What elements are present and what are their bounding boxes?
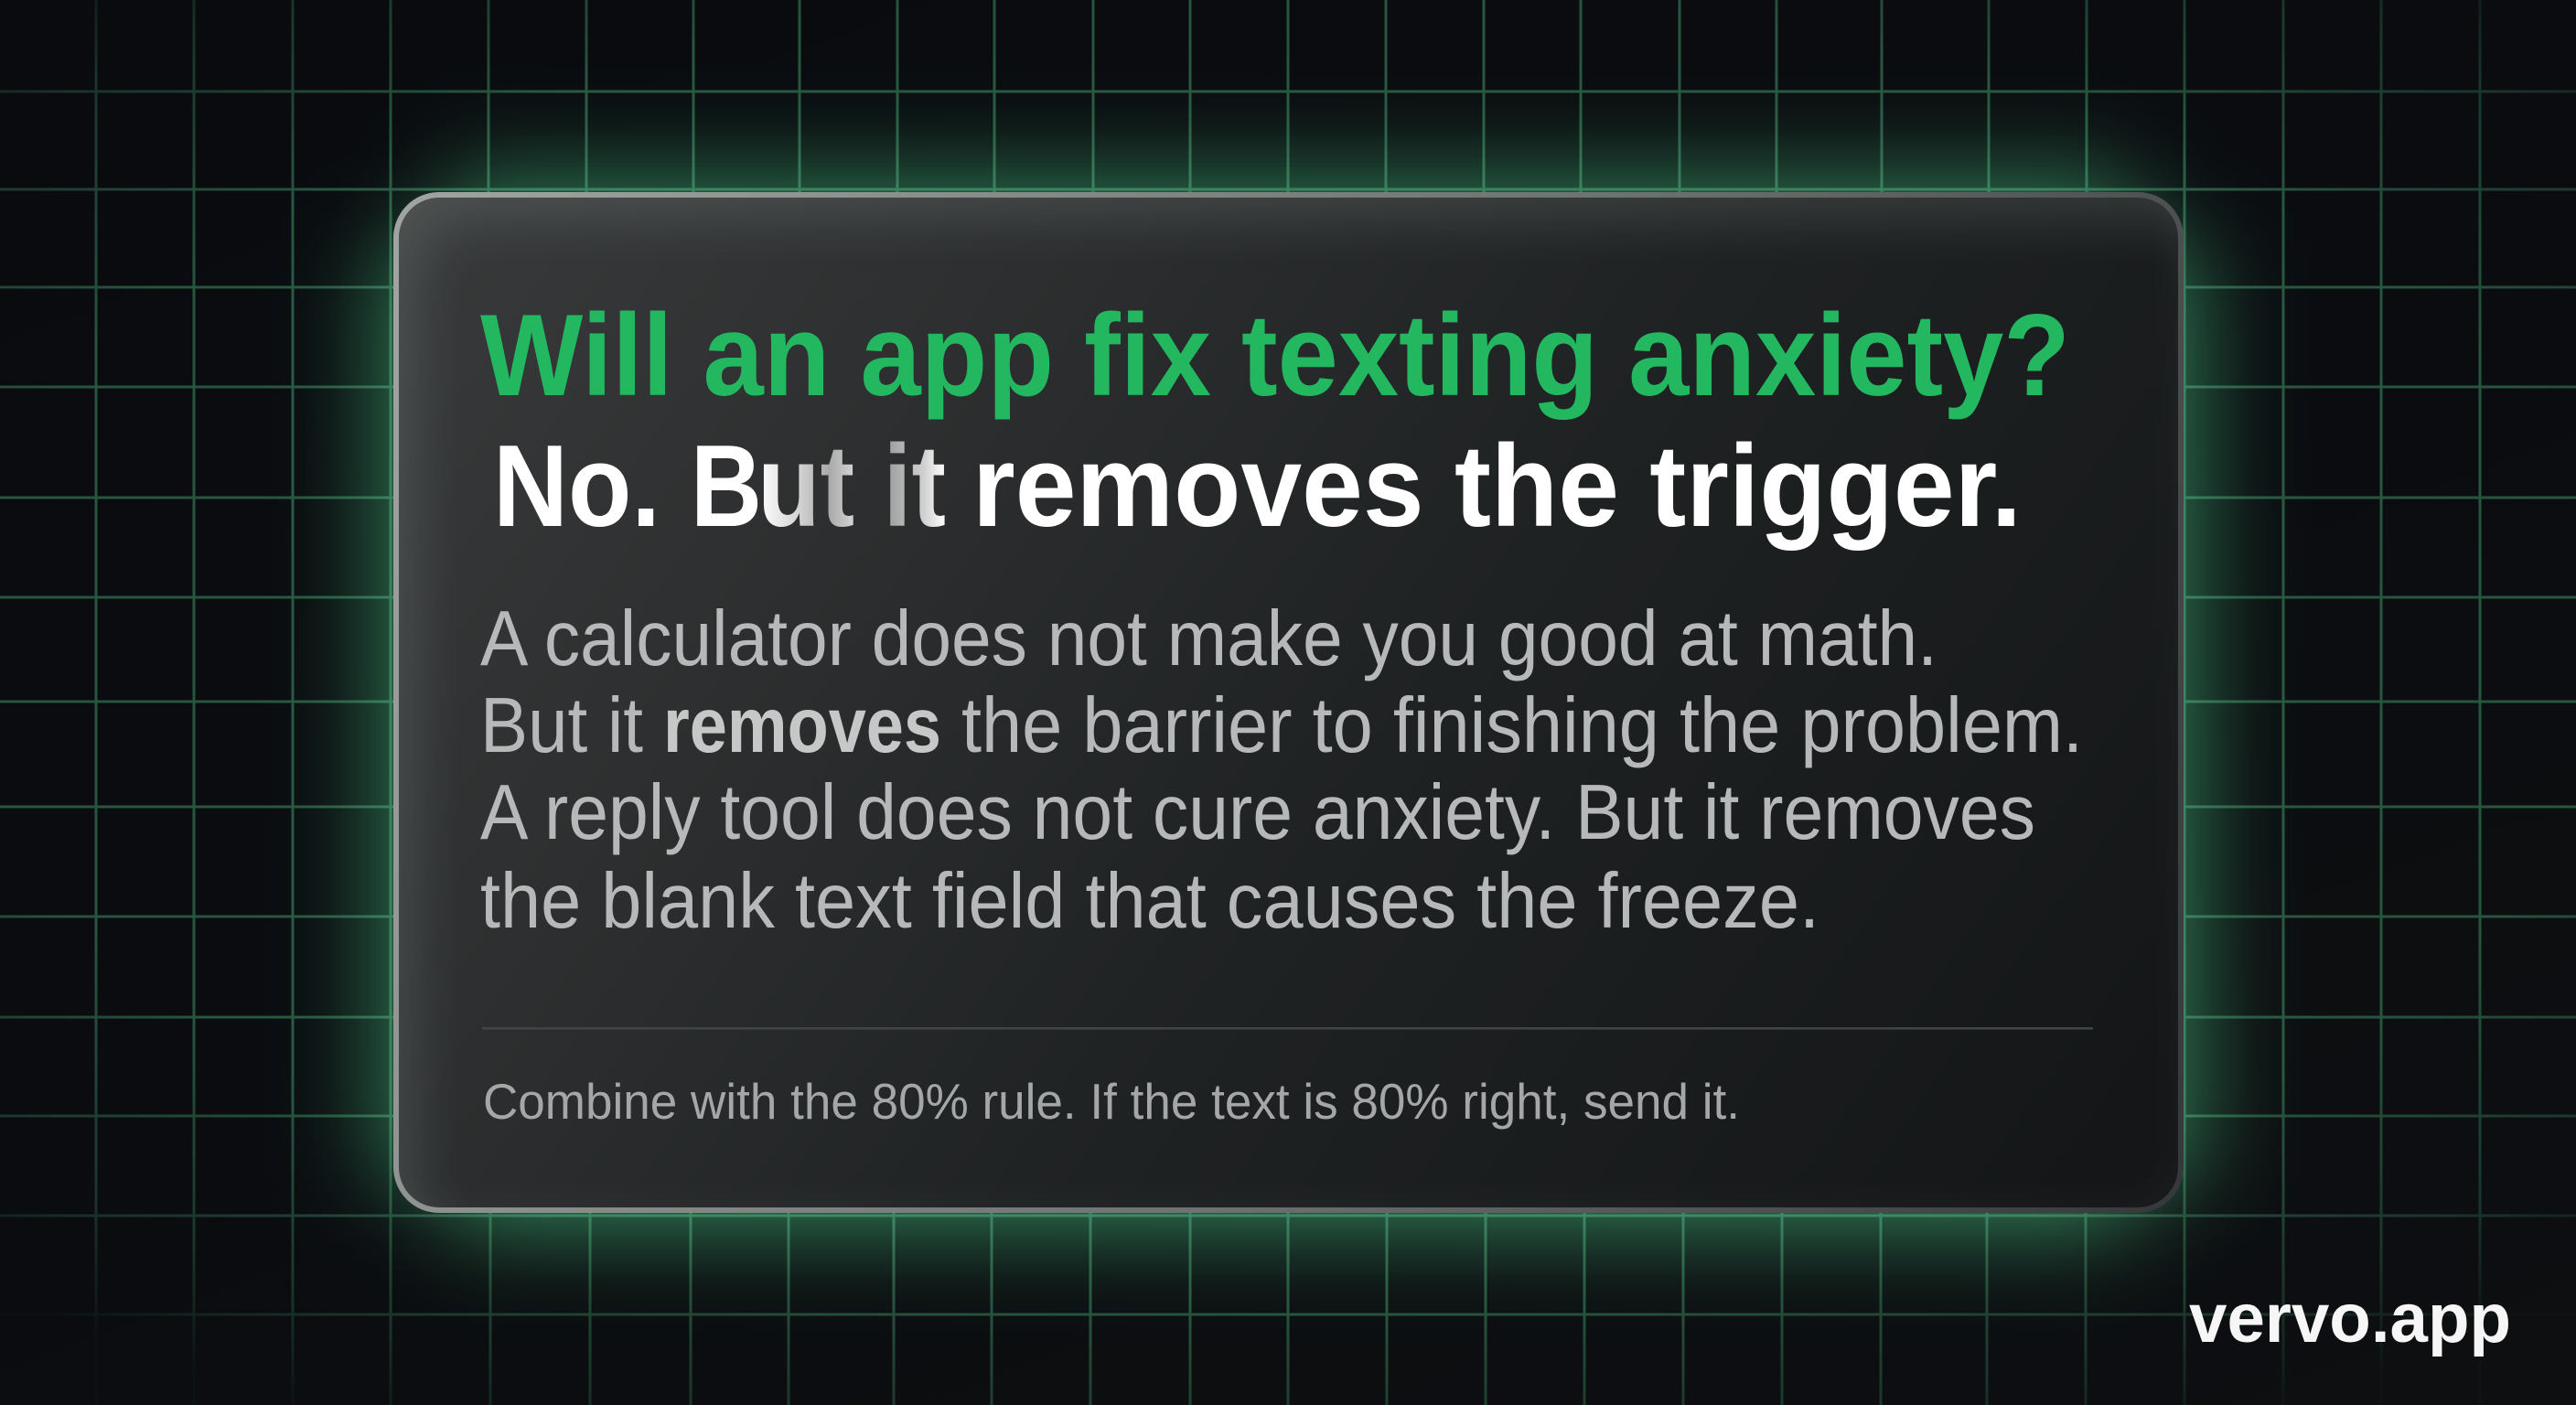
heading: question: Will an app fix texting anxiety? (480, 290, 2070, 420)
green glow left and right of card (370, 242, 2206, 1180)
heading: answer: removes the trigger. (972, 421, 2022, 551)
brand wordmark: vervo.app (2189, 1280, 2511, 1357)
body text: the barrier to finishing the problem. (961, 682, 2083, 769)
body text: the blank text field that causes the freeze. (480, 858, 1819, 945)
body text: removes (663, 682, 941, 769)
body text: But it (480, 682, 643, 769)
panel: message card (393, 192, 2184, 1213)
body text (480, 595, 2083, 945)
body text: A reply tool does not cure anxiety. But it removes (480, 769, 2035, 856)
heading: answer: ut it (757, 421, 946, 551)
body text: A calculator does not make you good at math. (480, 595, 1937, 682)
heading: answer: B (691, 421, 762, 551)
green glow above and below card (448, 169, 2131, 1236)
footer note: Combine with the 80% rule. If the text is 80% right, send it. (483, 1073, 1740, 1130)
heading: answer: No. (493, 421, 660, 551)
heading: answer (493, 421, 2022, 551)
